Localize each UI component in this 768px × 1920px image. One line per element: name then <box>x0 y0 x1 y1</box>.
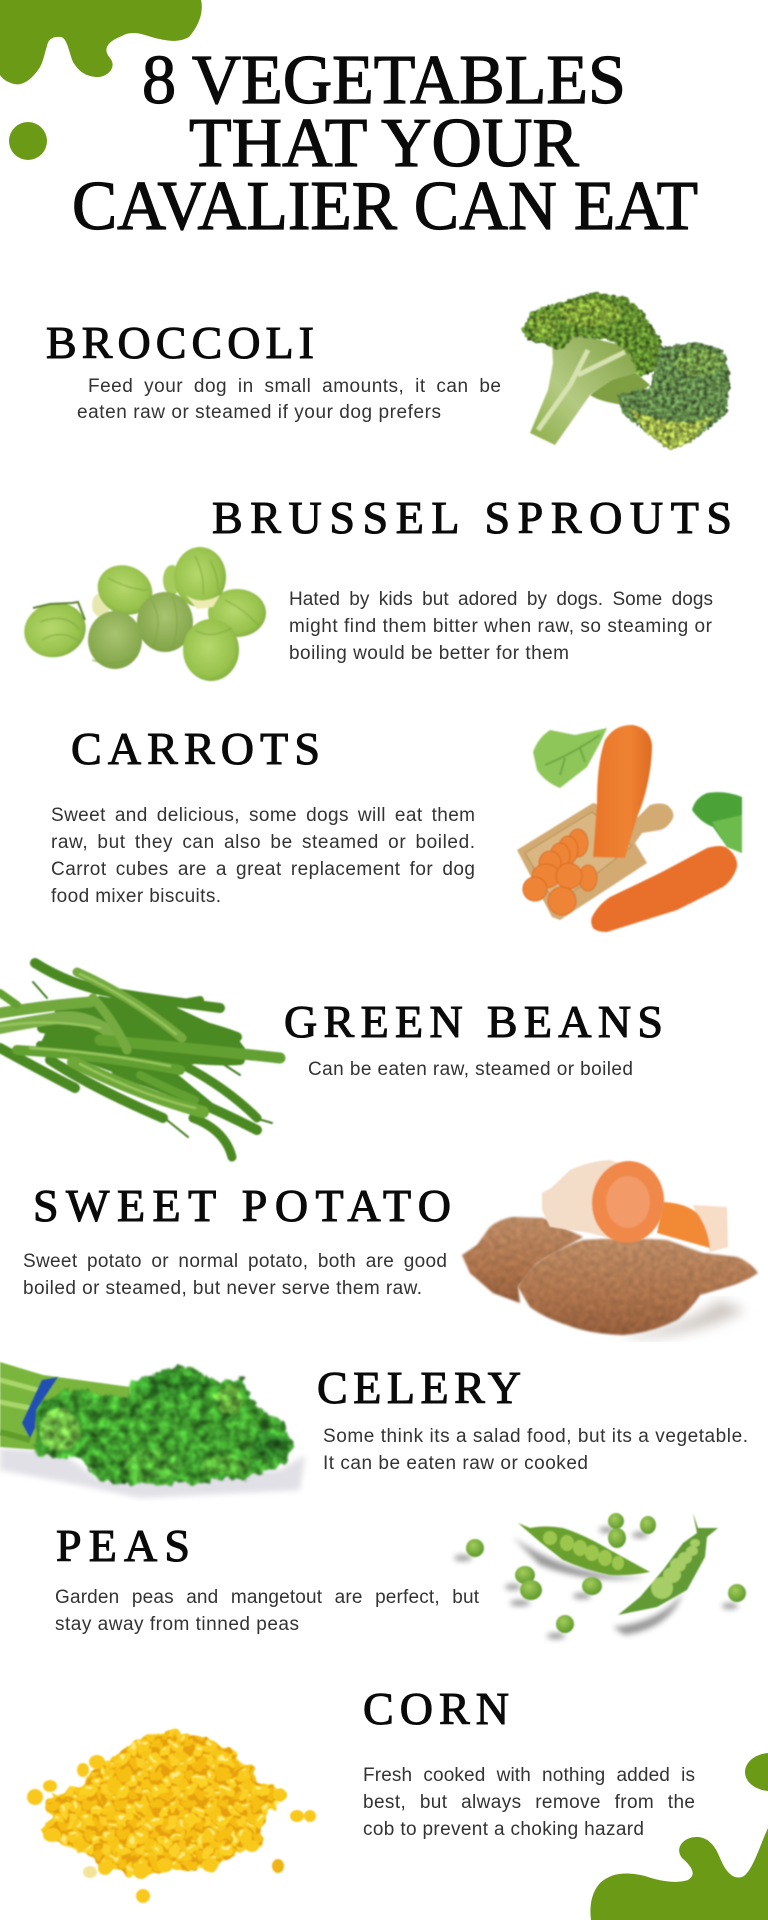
decorative green dot top left <box>9 122 47 160</box>
heading: peas: PEAS <box>56 1520 190 1571</box>
text: peas description: Garden peas and mangetout are perfect, but <box>55 1587 480 1608</box>
text: corn description <box>363 1765 695 1840</box>
title <box>72 42 698 245</box>
text: corn description: Fresh cooked with nothing added is <box>363 1765 695 1786</box>
panel: sweet potato <box>23 1157 758 1338</box>
panel: green beans <box>0 963 663 1157</box>
text: brussel sprouts description: Hated by kids but adored by dogs. Some dogs <box>289 589 713 610</box>
heading: corn: CORN <box>363 1683 509 1734</box>
text: green beans description: Can be eaten raw, steamed or boiled <box>308 1059 633 1080</box>
heading: carrots: CARROTS <box>71 723 320 774</box>
text: broccoli description: eaten raw or steamed if your dog prefers <box>77 402 441 423</box>
text: sweet potato description: Sweet potato or normal potato, both are good <box>23 1251 447 1272</box>
panel: corn <box>27 1683 695 1903</box>
text: carrots description: Sweet and delicious, some dogs will eat them <box>51 805 475 826</box>
text: sweet potato description <box>23 1251 447 1299</box>
icon: green beans <box>0 963 280 1157</box>
icon: carrots on chopping board <box>517 725 742 932</box>
icon: brussel sprouts <box>18 547 266 681</box>
heading: broccoli: BROCCOLI <box>46 317 314 368</box>
text: celery description <box>323 1426 748 1474</box>
text: peas description <box>55 1587 480 1635</box>
text: celery description: It can be eaten raw or cooked <box>323 1453 588 1474</box>
text: celery description: Some think its a salad food, but its a vegetable. <box>323 1426 748 1447</box>
icon: sweet potatoes <box>462 1157 758 1338</box>
heading: celery: CELERY <box>317 1362 521 1413</box>
title: THAT YOUR <box>189 105 579 182</box>
heading: green beans: GREEN BEANS <box>284 996 663 1047</box>
decorative green splash bottom right <box>590 1828 768 1920</box>
title: CAVALIER CAN EAT <box>72 168 698 245</box>
panel: celery <box>0 1362 748 1498</box>
icon: broccoli <box>522 292 730 450</box>
heading: sweet potato: SWEET POTATO <box>33 1180 451 1231</box>
title: 8 VEGETABLES <box>142 42 626 119</box>
panel: broccoli <box>46 292 730 450</box>
icon: peas and pods <box>454 1513 746 1639</box>
text: sweet potato description: boiled or steamed, but never serve them raw. <box>23 1278 422 1299</box>
text: corn description: cob to prevent a choking hazard <box>363 1819 644 1840</box>
text: brussel sprouts description: might find them bitter when raw, so steaming or <box>289 616 713 637</box>
heading: brussel sprouts: BRUSSEL SPROUTS <box>212 492 732 543</box>
text: carrots description: raw, but they can also be steamed or boiled. <box>51 832 475 853</box>
text: corn description: best, but always remove from the <box>363 1792 695 1813</box>
text: carrots description: Carrot cubes are a great replacement for dog <box>51 859 475 880</box>
text: brussel sprouts description <box>289 589 713 664</box>
text: carrots description: food mixer biscuits. <box>51 886 221 907</box>
panel: carrots <box>51 723 742 932</box>
panel: brussel sprouts <box>18 492 732 681</box>
text: broccoli description: Feed your dog in small amounts, it can be <box>88 376 501 397</box>
panel: peas <box>55 1513 746 1639</box>
text: carrots description <box>51 805 475 907</box>
decorative green dot bottom right <box>745 1753 768 1791</box>
text: brussel sprouts description: boiling would be better for them <box>289 643 569 664</box>
decorative green splash top left <box>0 0 202 84</box>
icon: pile of corn kernels <box>27 1728 316 1903</box>
text: peas description: stay away from tinned peas <box>55 1614 299 1635</box>
icon: celery <box>0 1362 305 1498</box>
text: broccoli description <box>77 376 501 423</box>
